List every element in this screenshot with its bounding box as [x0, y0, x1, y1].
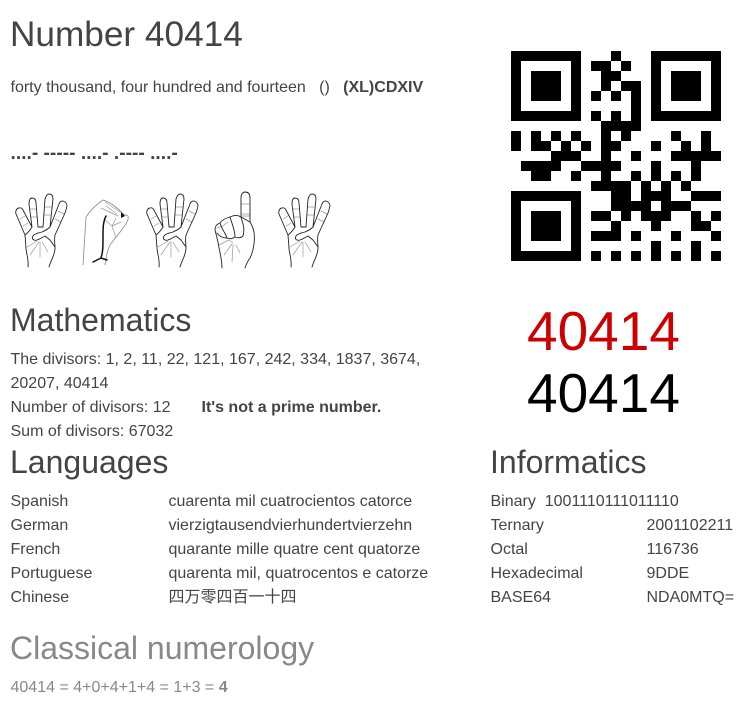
informatics table: 116736	[646, 541, 699, 558]
hand: digit 0	[83, 200, 128, 265]
languages table: Chinese	[10, 589, 69, 606]
languages table: cuarenta mil cuatrocientos catorce	[168, 493, 412, 510]
mathematics text	[10, 351, 420, 440]
informatics table	[490, 493, 734, 606]
number in black: 40414	[527, 362, 680, 424]
morse code: ....- ----- ....- .---- ....-	[10, 143, 178, 164]
informatics table: Ternary	[490, 517, 544, 534]
heading: Mathematics: Mathematics	[10, 302, 191, 338]
title: Number 40414	[10, 15, 243, 54]
mathematics text: 20207, 40414	[10, 375, 108, 392]
mathematics text: Number of divisors: 12	[10, 399, 171, 416]
mathematics text: Sum of divisors: 67032	[10, 423, 173, 440]
languages table: 四万零四百一十四	[168, 589, 297, 606]
informatics table: NDA0MTQ=	[646, 589, 734, 606]
informatics table: Binary 1001110111011110	[490, 493, 679, 510]
mathematics text: The divisors: 1, 2, 11, 22, 121, 167, 242, 334, 1837, 3674,	[10, 351, 420, 368]
hand: digit 4	[279, 194, 330, 267]
informatics table: 9DDE	[646, 565, 689, 582]
hand: digit 1	[215, 192, 254, 268]
informatics table: BASE64	[490, 589, 551, 606]
languages table: French	[10, 541, 60, 558]
heading: Languages: Languages	[10, 444, 168, 480]
languages table: Portuguese	[10, 565, 92, 582]
languages table: Spanish	[10, 493, 68, 510]
informatics table: Octal	[490, 541, 528, 558]
languages table: vierzigtausendvierhundertvierzehn	[168, 517, 412, 534]
mathematics text: It's not a prime number.	[202, 399, 381, 416]
languages table: German	[10, 517, 68, 534]
heading: Classical numerology: Classical numerology	[10, 630, 314, 666]
languages table	[10, 493, 428, 606]
number in red: 40414	[527, 300, 680, 362]
languages table: quarenta mil, quatrocentos e catorze	[168, 565, 428, 582]
hand: digit 4	[16, 194, 67, 267]
numerology calculation: 40414 = 4+0+4+1+4 = 1+3 = 4	[10, 679, 228, 696]
number in words and Roman numeral: forty thousand, four hundred and fourteen () (XL)CDXIV	[10, 79, 423, 96]
informatics table: Hexadecimal	[490, 565, 583, 582]
heading: Informatics: Informatics	[490, 444, 646, 480]
hand: digit 4	[147, 194, 198, 267]
informatics table: 2001102211	[646, 517, 733, 534]
languages table: quarante mille quatre cent quatorze	[168, 541, 420, 558]
